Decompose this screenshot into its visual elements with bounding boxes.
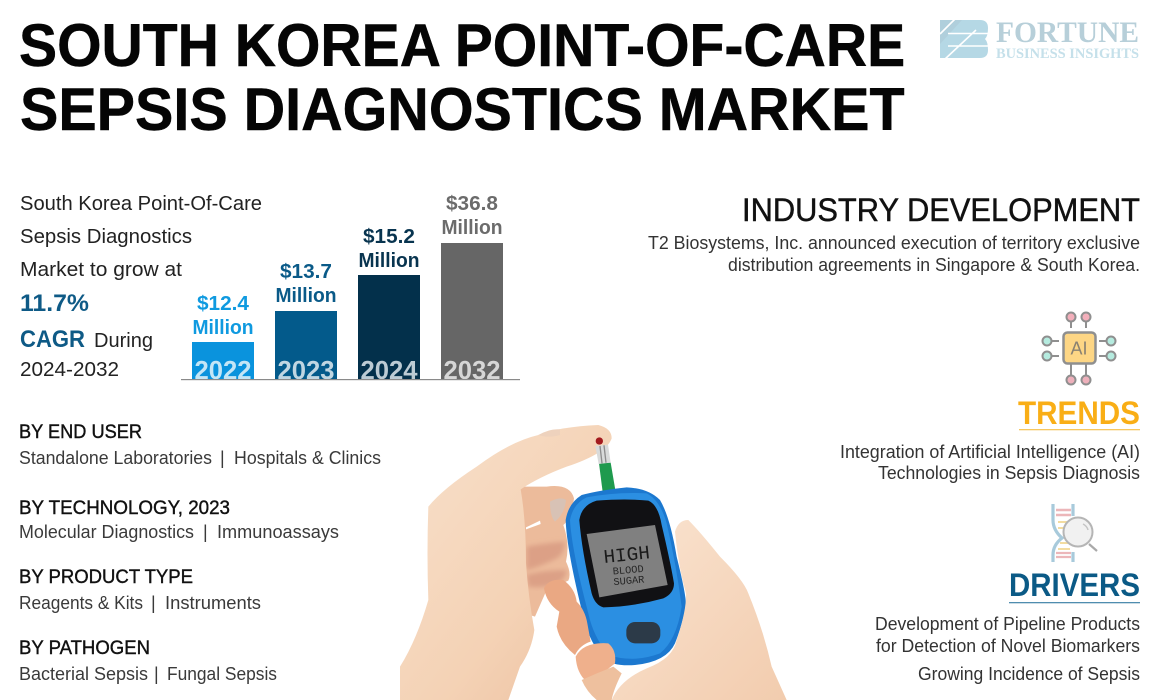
bar 2032 (441, 193, 503, 385)
segment: by product type: Reagents & Kits (19, 593, 143, 613)
bar 2022: $12.4 (197, 293, 250, 315)
segment: by pathogen (19, 637, 277, 684)
bar 2022: 2022 (194, 355, 252, 385)
CAGR text block: 2024-2032 (20, 359, 119, 381)
meter button (626, 622, 660, 643)
bar 2032: 2032 (444, 355, 500, 385)
icon: AI chip (1042, 312, 1116, 384)
CAGR text block: Sepsis Diagnostics (20, 226, 192, 248)
meter screen bezel (579, 499, 674, 607)
test strip (595, 437, 615, 492)
segment: by product type: BY PRODUCT TYPE (19, 566, 193, 588)
segment: by end user: BY END USER (19, 421, 142, 443)
segment: by product type: | (151, 593, 156, 613)
meter body: HIGH (603, 542, 651, 569)
industry development: distribution agreements in Singapore & South Korea. (728, 255, 1140, 275)
drivers: for Detection of Novel Biomarkers (876, 636, 1140, 656)
industry development: T2 Biosystems, Inc. announced execution of territory exclusive (648, 233, 1140, 253)
meter body: SUGAR (613, 574, 645, 589)
bar 2032: $36.8 (446, 193, 498, 215)
bar 2023: Million (276, 285, 336, 307)
industry development: INDUSTRY DEVELOPMENT (742, 192, 1140, 228)
segment: by product type (19, 566, 261, 613)
icon: AI chip: AI (1070, 338, 1088, 358)
lower fingers of left hand (513, 486, 574, 617)
segment: by technology: Immunoassays (217, 522, 339, 542)
logo: Fortune Business Insights: FORTUNE (996, 16, 1139, 49)
logo: Fortune Business Insights (940, 16, 1139, 62)
CAGR text block: 11.7% (20, 290, 89, 317)
trends: Technologies in Sepsis Diagnosis (878, 463, 1140, 483)
title (19, 13, 905, 143)
CAGR text block: South Korea Point-Of-Care (20, 193, 262, 215)
drivers: Development of Pipeline Products (875, 614, 1140, 634)
segment: by pathogen: Fungal Sepsis (167, 664, 277, 684)
fingers over meter (544, 580, 615, 682)
segment: by technology: BY TECHNOLOGY, 2023 (19, 497, 230, 519)
segment: by pathogen: | (154, 664, 159, 684)
meter body: BLOOD (612, 564, 644, 579)
drivers (875, 567, 1140, 684)
drivers: Growing Incidence of Sepsis (918, 664, 1140, 684)
CAGR text block: Market to grow at (20, 259, 182, 281)
trends: TRENDS (1018, 395, 1140, 431)
meter body (566, 487, 686, 665)
bar 2024: $15.2 (363, 226, 415, 248)
bar 2024 (358, 226, 420, 385)
segment: by product type: Instruments (165, 593, 261, 613)
trends: Integration of Artificial Intelligence (AI) (840, 442, 1140, 462)
industry development (648, 192, 1140, 275)
bar 2024: 2024 (360, 355, 418, 385)
drivers: DRIVERS (1009, 567, 1140, 603)
segment: by end user: Hospitals & Clinics (234, 448, 381, 468)
segment: by pathogen: BY PATHOGEN (19, 637, 150, 659)
photo: hands holding blue glucose meter (400, 425, 787, 700)
segment: by end user: Standalone Laboratories (19, 448, 212, 468)
left hand back and thumb (400, 425, 612, 700)
segment: by technology (19, 497, 339, 542)
logo: Fortune Business Insights: BUSINESS INSIGHTS (996, 46, 1139, 62)
segment: by technology: Molecular Diagnostics (19, 522, 194, 542)
CAGR text block: CAGR (20, 326, 85, 353)
right hand (612, 520, 787, 700)
CAGR text block: During (94, 330, 153, 352)
segment: by pathogen: Bacterial Sepsis (19, 664, 148, 684)
segment: by end user (19, 421, 381, 468)
bar chart (181, 193, 520, 385)
meter LCD (587, 525, 668, 597)
bar 2023: 2023 (278, 355, 334, 385)
bar 2032: Million (442, 217, 502, 239)
bar 2022 (192, 293, 254, 385)
bar 2023 (275, 261, 337, 385)
bar 2023: $13.7 (280, 261, 332, 283)
title: SOUTH KOREA POINT-OF-CARE (19, 13, 905, 79)
bar 2022: Million (192, 317, 254, 339)
segment: by end user: | (220, 448, 225, 468)
trends (840, 395, 1140, 483)
segment: by technology: | (203, 522, 208, 542)
bar 2024: Million (358, 250, 420, 272)
icon: DNA with magnifier (1053, 504, 1097, 562)
title: SEPSIS DIAGNOSTICS MARKET (20, 77, 905, 143)
CAGR text block (20, 193, 262, 381)
